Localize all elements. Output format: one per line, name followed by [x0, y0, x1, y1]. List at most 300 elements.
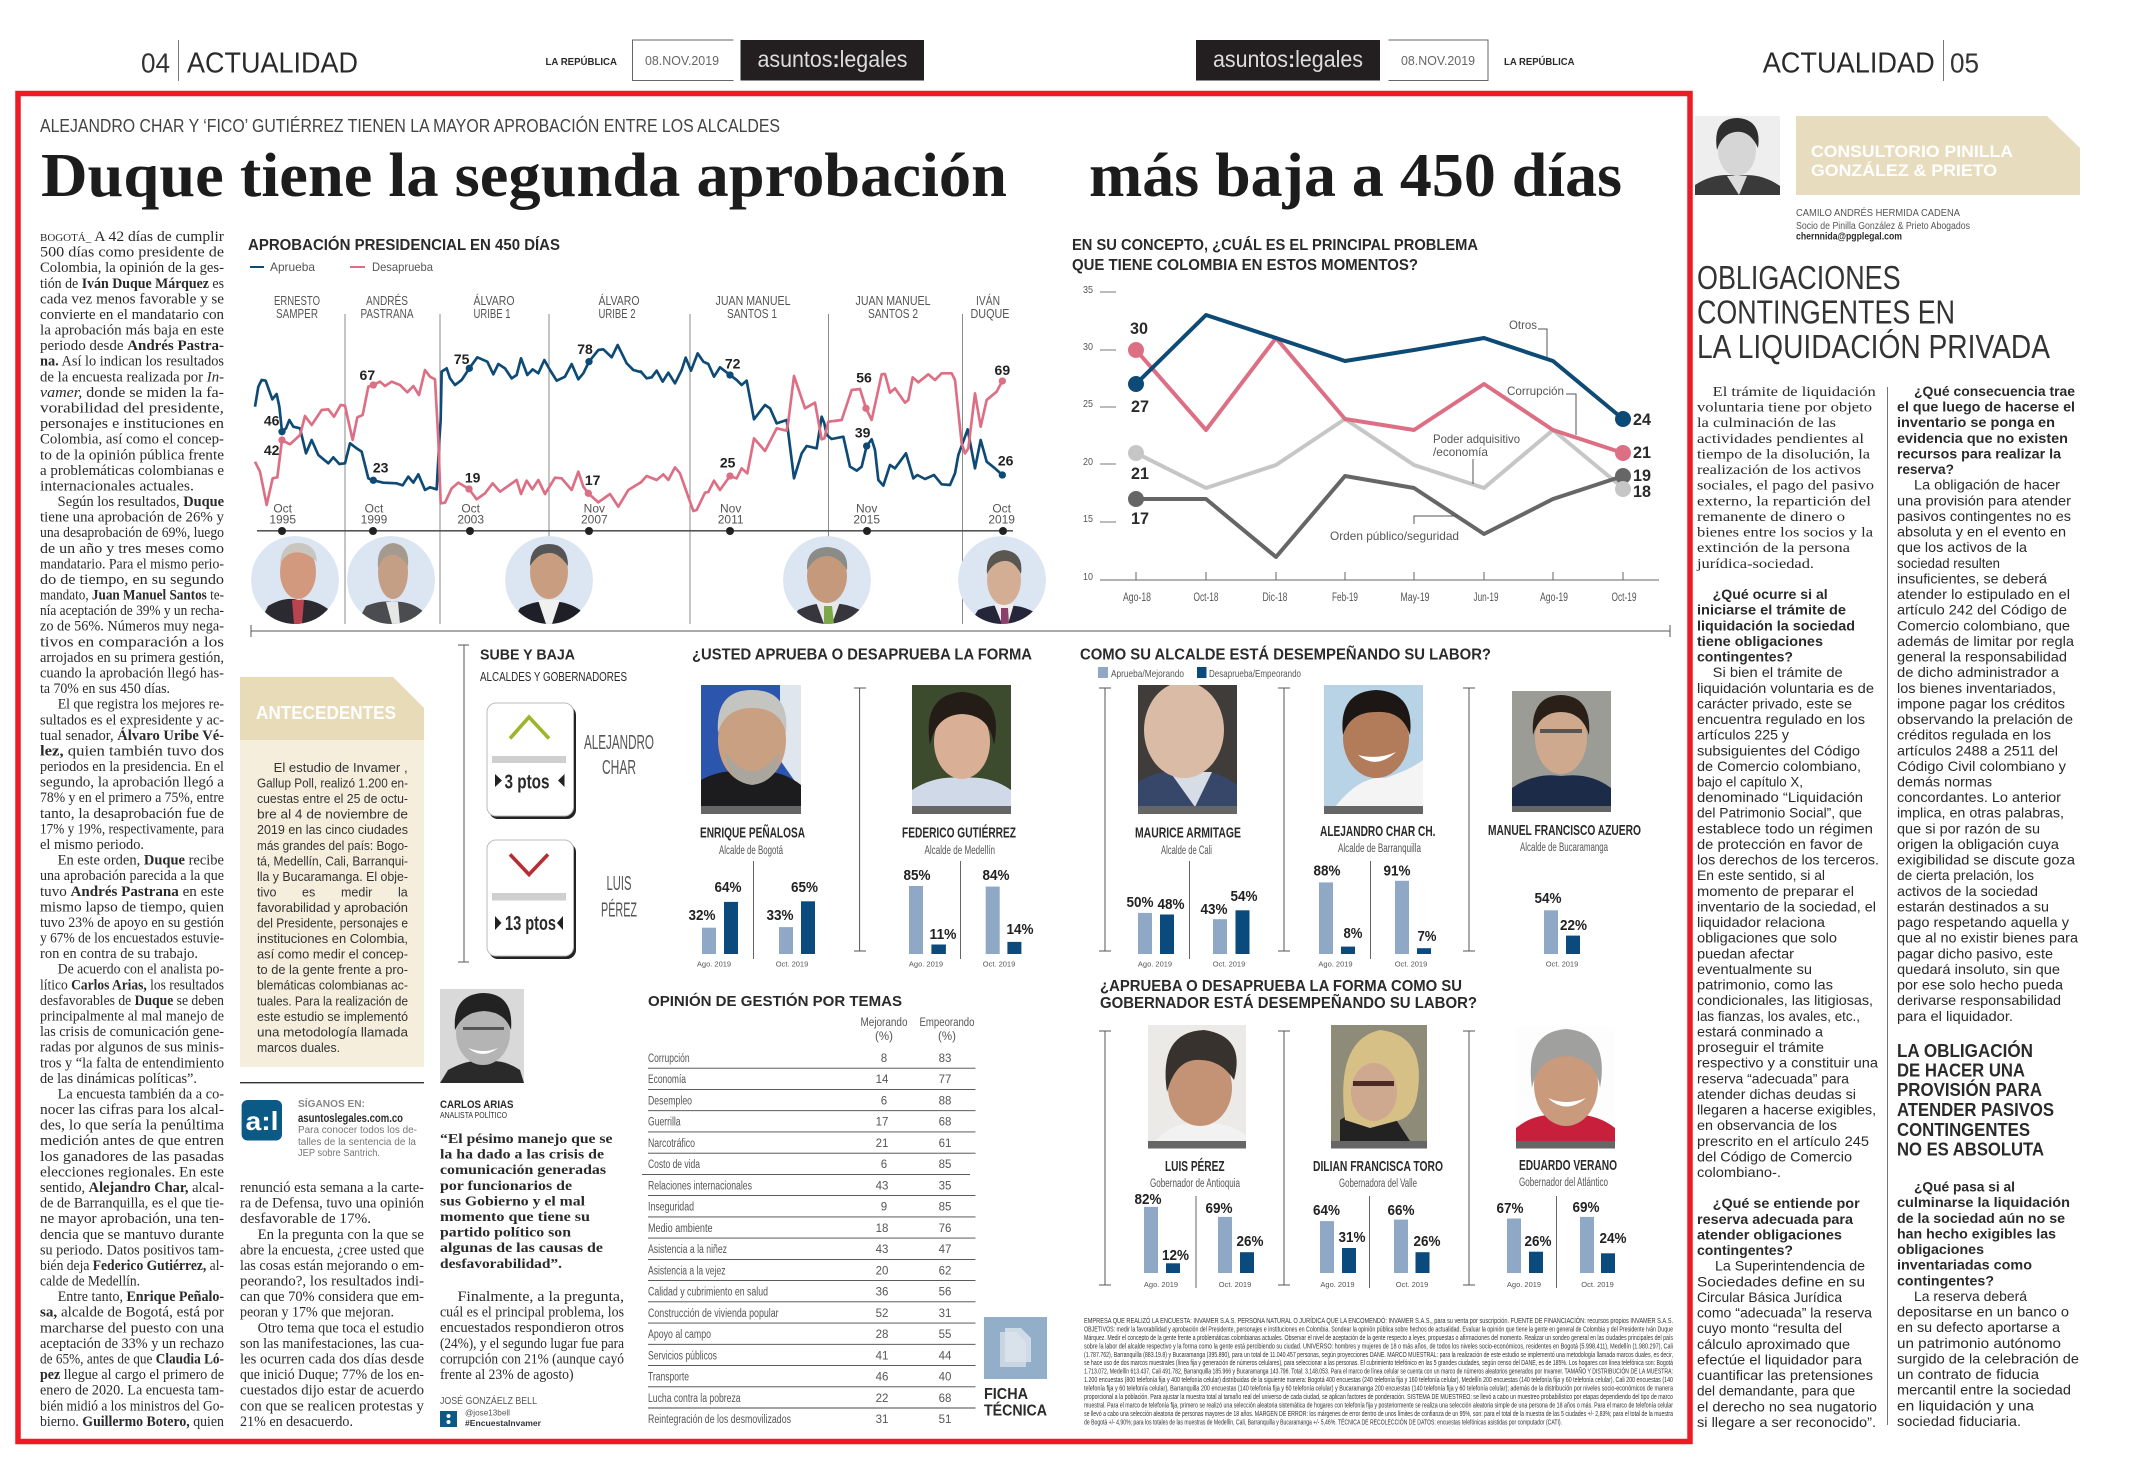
- value labels: 39: [855, 425, 871, 441]
- article text column 2: En la pregunta con la que se: [258, 1227, 424, 1243]
- article text column 2: desfavorable de 17%.: [240, 1211, 371, 1227]
- topic labels: Inseguridad: [648, 1202, 694, 1214]
- article text column 1: mismo lapso de tiempo, quien: [40, 899, 224, 915]
- empeorando values: 55: [939, 1329, 951, 1341]
- governor: Pérez: [1134, 1025, 1264, 1289]
- legal column 2 lower: surgido de la celebración de: [1897, 1351, 2079, 1366]
- governor: Toro: [1313, 1025, 1443, 1289]
- timeline axis with dots: [257, 527, 1013, 535]
- bars: 82%: [1134, 1191, 1162, 1208]
- article text column 1: y 67% de los encuestados estuvie-: [40, 931, 224, 947]
- presidential approval chart: [248, 235, 1046, 626]
- article text column 1: bién deja Federico Gutiérrez, al-: [40, 1258, 225, 1274]
- article text column 1: tros y “la falta de entendimiento: [40, 1055, 224, 1071]
- follow us text: SÍGANOS EN:: [298, 1097, 365, 1110]
- asuntos legales logo: [740, 40, 924, 80]
- empeorando values: 47: [939, 1244, 951, 1256]
- article text column 1: internacionales actuales.: [40, 478, 194, 494]
- president names: [274, 293, 1010, 321]
- legal column 1: sociales, el pago del pasivo: [1697, 478, 1874, 493]
- value labels: 18: [1633, 482, 1651, 501]
- column headers: (%): [875, 1031, 893, 1043]
- legal column 1: subsiguientes del Código: [1697, 743, 1860, 758]
- value labels: 25: [720, 455, 736, 471]
- survey technical note: telefonía fija y 60 telefonía celular), Barranquilla 200 encuestas (140 telefonía fija y 60 telefonía celular) y Bucaramanga 200 encuestas (140 telefonía fija y 60 telefonía celular); además de la distribución por niveles socio-económicos de manera: [1084, 1386, 1673, 1393]
- bars: 24%: [1600, 1230, 1626, 1247]
- topic labels: [648, 1053, 791, 1426]
- president names: ÁLVARO: [598, 293, 640, 308]
- mejorando values: 28: [876, 1329, 888, 1341]
- author byline: JOSÉ GONZÁELZ BELL: [440, 1394, 537, 1407]
- legal column 2 upper: el que luego de hacerse el: [1897, 400, 2075, 415]
- article text column 1: de de Barranquilla, es el que tie-: [40, 1196, 224, 1212]
- legal column 2 upper: inventario se ponga en: [1897, 415, 2055, 430]
- legal column 2 upper: implica, en otras palabras,: [1897, 806, 2064, 821]
- legal column 2 upper: absoluta y en el evento en: [1897, 525, 2066, 540]
- antecedentes text: cuestas entre el 25 de octu-: [257, 792, 408, 806]
- y axis: 15: [1083, 513, 1093, 525]
- legal column 1: Sociedades define en su: [1697, 1274, 1865, 1289]
- legal column 1: efectúe el liquidador para: [1697, 1352, 1862, 1367]
- column headline: OBLIGACIONES: [1697, 259, 1901, 296]
- topic labels: Asistencia a la vejez: [648, 1265, 726, 1277]
- names: CHAR: [602, 757, 636, 779]
- article text column 1: 78% y en el primero a 75%, entre: [40, 790, 224, 806]
- topic labels: Costo de vida: [648, 1159, 700, 1171]
- name: [1488, 822, 1641, 854]
- legal column 2 upper: demás normas: [1897, 774, 1992, 789]
- legal column 1: respectivo y a constituir una: [1697, 1056, 1878, 1071]
- bars: 32%: [688, 907, 716, 924]
- article text column 1: marcharse del puesto con una: [40, 1320, 225, 1336]
- antecedentes text: 2019 en las cinco ciudades: [257, 823, 408, 837]
- article text column 2: 21% en desacuerdo.: [240, 1414, 353, 1430]
- legal column 2 upper: quedará insoluto, sin que: [1897, 962, 2060, 977]
- antecedentes text: favorabilidad y aprobación: [257, 901, 408, 915]
- mejorando values: 14: [876, 1074, 889, 1086]
- bars: Ago. 2019: [1318, 960, 1353, 969]
- article text column 1: sa, alcalde de Bogotá, está por: [40, 1305, 214, 1321]
- article text column 1: nía aceptación de 39% y un recha-: [40, 603, 224, 619]
- heading: COMO SU ALCALDE ESTÁ DESEMPEÑANDO SU LABOR?: [1080, 644, 1491, 664]
- date box: 08.NOV.2019: [1401, 53, 1475, 68]
- bars: 69%: [1572, 1199, 1600, 1216]
- heading: ¿APRUEBA O DESAPRUEBA LA FORMA COMO SU: [1100, 978, 1462, 995]
- bars: Oct. 2019: [1213, 960, 1245, 969]
- antecedentes text: tuales. Para la realización de: [257, 994, 408, 1008]
- column headline: CONTINGENTES EN: [1697, 294, 1955, 331]
- article text column 2: peoran y 17% que mejoran.: [240, 1305, 394, 1321]
- legal column 1: del demandante, para que: [1697, 1384, 1855, 1399]
- name: [1519, 1157, 1617, 1189]
- legal column 2 lower: un patrimonio autónomo: [1897, 1336, 2061, 1351]
- article text column 1: medición antes de que entren: [40, 1133, 224, 1149]
- survey technical note: sobre la labor del alcalde respectivo y la forma como la gente está percibiendo su ciudad. UNIVERSO: hombres y mujeres de 18 o más años, de todos los niveles socio-económicos, residentes en Bogotá (5.998.411), Medellín (1.980.297), Cali: [1084, 1343, 1673, 1350]
- president names: JUAN MANUEL: [856, 293, 930, 308]
- value labels: 17: [1131, 509, 1149, 528]
- series: corrupcion: [1136, 338, 1623, 453]
- mejorando values: 6: [881, 1096, 887, 1108]
- legal column 1: contingentes?: [1697, 650, 1793, 665]
- bars: 26%: [1524, 1233, 1552, 1250]
- value labels: 19: [1633, 466, 1651, 485]
- legal column 1: tiempo de la disolución, la: [1697, 446, 1870, 461]
- antecedentes text: instituciones en Colombia,: [257, 932, 408, 946]
- label: [984, 1386, 1047, 1420]
- empeorando values: 76: [939, 1223, 951, 1235]
- article text column 3: frente al 23% de agosto): [440, 1367, 574, 1383]
- name: [1313, 1158, 1443, 1190]
- y axis: 30: [1083, 341, 1093, 353]
- empeorando values: 85: [939, 1202, 951, 1214]
- antecedentes text: to de la gente frente a pro-: [257, 963, 408, 977]
- legal column 1: condicionales, las litigiosas,: [1697, 993, 1873, 1008]
- article text column 1: ta 70% en sus 450 días.: [40, 681, 170, 697]
- legal column 1: liquidación la sociedad: [1697, 618, 1855, 633]
- survey technical note: de Bogotá +/- 4,90%; para los totales de las muestras de Medellín, Cali, Barranquilla y Bucaramanga +/- 5,46%. TÉCNICA DE RECOLECCIÓN DE DATOS: encuestas telefónicas asistidas por computador (CATI).: [1084, 1417, 1562, 1426]
- date labels: Oct: [461, 501, 481, 515]
- portrait: Santos: [783, 536, 871, 626]
- kicker: ALEJANDRO CHAR Y ‘FICO’ GUTIÉRREZ TIENEN LA MAYOR APROBACIÓN ENTRE LOS ALCALDES: [40, 115, 780, 136]
- article text column 1: una desaprobación de 69%, luego: [40, 525, 224, 541]
- disapprove line: [640, 373, 1002, 511]
- legal column 2 lower: contingentes?: [1897, 1273, 1994, 1288]
- survey technical note: EMPRESA QUE REALIZÓ LA ENCUESTA: INVAMER S.A.S. PERSONA NATURAL O JURÍDICA QUE LA ENCOMENDÓ: INVAMER S.A.S., para su venta por suscripción. FUENTE DE FINANCIACIÓN: recursos propios INVAMER S.A.S.: [1084, 1316, 1673, 1325]
- quote: desfavorabilidad”.: [440, 1257, 562, 1272]
- name: Alcalde de Bucaramanga: [1520, 842, 1608, 854]
- article text column 2: cuestados dijo estar de acuerdo: [240, 1383, 424, 1399]
- article text column 3: cuál es el principal problema, los: [440, 1305, 624, 1321]
- legal column 2 upper: activos de la sociedad: [1897, 884, 2038, 899]
- follow us text: [298, 1097, 417, 1159]
- section rule: [251, 625, 1670, 637]
- legal column 2 upper: artículo 242 del Código de: [1897, 603, 2067, 618]
- article text column 1: radas por algunos de sus minis-: [40, 1040, 224, 1056]
- legal column 1: La Superintendencia de: [1715, 1259, 1865, 1274]
- bars: Oct. 2019: [776, 960, 808, 969]
- mejorando values: 22: [876, 1393, 888, 1405]
- column headers: Empeorando: [920, 1017, 974, 1029]
- legal column 2 lower: han hecho exigibles las: [1897, 1226, 2056, 1241]
- legal column 2 upper: para el liquidador.: [1897, 1009, 2013, 1024]
- date labels: 1999: [361, 512, 388, 526]
- article text column 2: abre la encuesta, ¿cree usted que: [240, 1242, 424, 1258]
- series labels with leaders: Corrupción: [1507, 384, 1564, 398]
- president names: SAMPER: [276, 306, 318, 321]
- legal column 1: estará conminado a: [1697, 1024, 1823, 1039]
- quote: la ha dado a las crisis de: [440, 1148, 604, 1163]
- article text column 3: Finalmente, a la pregunta,: [458, 1289, 624, 1305]
- mejorando values: 17: [876, 1117, 888, 1129]
- legal column 1: patrimonio, como las: [1697, 978, 1833, 993]
- article text column 1: tual senador, Álvaro Uribe Vé-: [40, 728, 222, 744]
- article text column 1: de la encuesta realizada por In-: [40, 369, 223, 385]
- value labels: 24: [1633, 410, 1652, 429]
- mejorando values: 21: [876, 1138, 888, 1150]
- antecedentes text: la: [398, 885, 408, 899]
- analyst name: ANALISTA POLÍTICO: [440, 1110, 507, 1120]
- president names: SANTOS 1: [727, 306, 777, 321]
- mejorando values: 9: [881, 1202, 887, 1214]
- card: down 13 points: [487, 840, 576, 959]
- topic labels: Calidad y cubrimiento en salud: [648, 1287, 768, 1299]
- value labels: [720, 355, 1014, 471]
- article text column 1: vorabilidad del presidente,: [40, 400, 224, 416]
- legal column 1: de protección en favor de: [1697, 837, 1863, 852]
- x axis: Oct-19: [1612, 592, 1636, 604]
- legend: Aprueba: [270, 260, 315, 274]
- legal column 2 upper: pagar dicho pasivo, este: [1897, 946, 2053, 961]
- mayor: Gutiérrez: [902, 685, 1034, 969]
- antecedentes text: marcos duales.: [257, 1041, 340, 1055]
- portrait: Hermida sketch: [1695, 116, 1780, 195]
- legal column 1: prescrito en el artículo 245: [1697, 1134, 1869, 1149]
- mayor: Peñalosa: [688, 685, 818, 969]
- bars: 22%: [1560, 917, 1587, 934]
- photo: Carlos Arias: [440, 989, 524, 1083]
- article text column 1: nocer las cifras para los alcal-: [40, 1102, 224, 1118]
- red article frame: [18, 94, 1690, 1442]
- legal column 1: cálculo aproximado que: [1697, 1337, 1850, 1352]
- value labels: 69: [995, 362, 1010, 378]
- topic labels: Reintegración de los desmovilizados: [648, 1414, 791, 1426]
- chart title: APROBACIÓN PRESIDENCIAL EN 450 DÍAS: [248, 235, 560, 254]
- legal column 1: inventario de la sociedad, el: [1697, 899, 1876, 914]
- article text column 1: cuando la aprobación llegó has-: [40, 666, 224, 682]
- mayor: Char: [1314, 685, 1436, 969]
- article text column 1: personajes e instituciones en: [40, 416, 224, 432]
- legal column 1: extinción de la persona: [1697, 540, 1850, 555]
- label: FICHA: [984, 1386, 1028, 1403]
- antecedentes text: es: [302, 885, 315, 899]
- mejorando values: 6: [881, 1159, 887, 1171]
- president names: ERNESTO: [274, 293, 320, 308]
- article text column 1: El que registra los mejores re-: [58, 697, 224, 713]
- legal column 2 lower: ¿Qué pasa si al: [1914, 1180, 2015, 1195]
- name: Alcalde de Medellín: [924, 845, 995, 857]
- follow us text: asuntoslegales.com.co: [298, 1113, 403, 1125]
- chart title: EN SU CONCEPTO, ¿CUÁL ES EL PRINCIPAL PROBLEMA: [1072, 235, 1478, 254]
- legal column 2 upper: Comercio colombiano, que: [1897, 618, 2070, 633]
- quote: por funcionarios de: [440, 1179, 572, 1194]
- article text column 1: des, lo que sería la penúltima: [40, 1118, 225, 1134]
- president names: IVÁN: [976, 293, 1000, 308]
- article text column 1: La encuesta también da a co-: [58, 1086, 224, 1102]
- legal column 1: eventualmente su: [1697, 962, 1812, 977]
- mayor: Azuero: [1488, 691, 1641, 969]
- bars: [1313, 1196, 1440, 1289]
- value labels: 26: [998, 453, 1014, 469]
- bars: 48%: [1158, 896, 1184, 913]
- legal column 2 lower: un contrato de fiducia: [1897, 1367, 2039, 1382]
- legal column 2 lower: depositarse en un banco o: [1897, 1305, 2069, 1320]
- president names: SANTOS 2: [868, 306, 918, 321]
- y axis: 10: [1083, 571, 1093, 583]
- topic labels: Asistencia a la niñez: [648, 1244, 727, 1256]
- value labels: 17: [585, 472, 601, 488]
- bars: Oct. 2019: [1219, 1280, 1251, 1289]
- antecedentes text: este estudio se implementó: [257, 1010, 408, 1024]
- icon: a:l logo: [242, 1100, 282, 1140]
- survey technical note: proporcional a la población. Para ajustar la muestra total al tamaño real del universo de cada ciudad, se aplican factores de ponderación. SISTEMA DE MUESTREO: se llevó a cabo un muestreo probabilístico por etapas dependiendo del tipo de marco: [1084, 1394, 1673, 1401]
- survey technical note: Márquez. Medir el concepto de la gente frente a problemáticas colombianas actuales. Observar el nivel de aceptación de la gente respecto a leyes, propuestas o afirmaciones del momento. Realizar un sondeo general en las ciudades principales del país: [1084, 1335, 1673, 1342]
- approval lines right half: [640, 353, 1015, 526]
- article text column 1: bierno. Guillermo Botero, quien: [40, 1414, 225, 1430]
- date labels: 2011: [718, 512, 744, 526]
- consultorio banner: [1796, 116, 2080, 195]
- article text column 1: enero de 2020. La encuesta tam-: [40, 1383, 224, 1399]
- bars: 54%: [1534, 890, 1562, 907]
- antecedentes box: [240, 677, 424, 1067]
- president names: ÁLVARO: [474, 293, 514, 308]
- problem line chart: [1072, 235, 1659, 604]
- legend: Desaprueba: [372, 260, 433, 274]
- topic labels: Relaciones internacionales: [648, 1180, 752, 1192]
- article text column 1: do de tiempo, en su segundo: [40, 572, 224, 588]
- bars: 64%: [714, 879, 742, 896]
- article text column 2: las cosas están mejorando o em-: [240, 1258, 424, 1274]
- consultorio banner: CONSULTORIO PINILLA: [1811, 142, 2013, 161]
- topic labels: Apoyo al campo: [648, 1329, 711, 1341]
- mejorando values: 41: [876, 1350, 888, 1362]
- bars: Oct. 2019: [983, 960, 1015, 969]
- mejorando values: 43: [876, 1244, 888, 1256]
- page number 05: 05: [1950, 48, 1979, 79]
- governor: Verano: [1496, 1027, 1626, 1289]
- bars: 50%: [1126, 894, 1154, 911]
- legal column 1: jurídica-sociedad.: [1696, 556, 1814, 571]
- legal column 1: momento de preparar el: [1697, 884, 1854, 899]
- heading: [1100, 978, 1477, 1012]
- names: LUIS: [606, 873, 632, 895]
- name: MAURICE ARMITAGE: [1135, 825, 1241, 842]
- topic labels: Guerrilla: [648, 1117, 681, 1129]
- bars: Oct. 2019: [1546, 960, 1578, 969]
- president names: URIBE 2: [598, 306, 636, 321]
- legal column 2 lower: en su defecto aportarse a: [1897, 1320, 2060, 1335]
- bars: [1134, 1191, 1264, 1289]
- legal column 2 upper: general la responsabilidad: [1897, 650, 2067, 665]
- article text column 1: arrojados en su primera gestión,: [40, 650, 224, 666]
- article text column 1: tivos en comparación a los: [40, 634, 225, 650]
- column headline: [1697, 259, 2050, 365]
- publication name: LA REPÚBLICA: [1504, 55, 1574, 68]
- article text column 1: De acuerdo con el analista po-: [58, 962, 224, 978]
- approval lines left half: [255, 341, 642, 526]
- quote: “El pésimo manejo que se: [440, 1132, 612, 1147]
- legal column 2 lower: culminarse la liquidación: [1897, 1195, 2070, 1210]
- pull quote: [1897, 1040, 2054, 1160]
- series: otros: [1136, 315, 1623, 419]
- author credit: CAMILO ANDRÉS HERMIDA CADENA: [1796, 206, 1960, 219]
- legal column 2 upper: exigibilidad se discute goza: [1897, 853, 2075, 868]
- quote: comunicación generadas: [440, 1163, 607, 1178]
- label: TÉCNICA: [984, 1403, 1047, 1420]
- bars: 91%: [1384, 862, 1410, 880]
- legal column 1: atender dichas deudas si: [1697, 1087, 1856, 1102]
- empeorando values: 68: [939, 1393, 951, 1405]
- legal column 1: cuyo monto “resulta del: [1697, 1321, 1842, 1336]
- legal column 1: remanente de dinero o: [1697, 509, 1845, 524]
- name: Gobernador de Antioquia: [1150, 1178, 1240, 1190]
- x axis: Feb-19: [1332, 592, 1358, 604]
- article text column 1: tuvo Andrés Pastrana en este: [40, 884, 221, 900]
- empeorando values: 62: [939, 1265, 951, 1277]
- legal column 1: del Código de Comercio: [1697, 1149, 1852, 1164]
- legal column 1: encuentra regulado en los: [1697, 712, 1865, 727]
- analyst block: [440, 989, 616, 1272]
- names: [584, 732, 654, 922]
- x axis: May-19: [1400, 592, 1430, 604]
- value labels: 67: [360, 367, 375, 383]
- name: MANUEL FRANCISCO AZUERO: [1488, 822, 1641, 839]
- mejorando values: 20: [876, 1265, 888, 1277]
- article text column 1: convierte en el mandatario con: [40, 307, 224, 323]
- date labels: Nov: [856, 501, 877, 515]
- value labels: 27: [1131, 397, 1149, 416]
- pull quote: NO ES ABSOLUTA: [1897, 1140, 2044, 1160]
- markers: [1128, 342, 1631, 507]
- asuntos legales logo: asuntos:legales: [1213, 46, 1363, 72]
- article text column 1: 500 días como presidente de: [40, 245, 224, 261]
- bars: Ago. 2019: [1320, 1280, 1355, 1289]
- consultorio banner: GONZÁLEZ & PRIETO: [1811, 161, 1997, 180]
- article text column 1: segundo, la aprobación llegó a: [40, 775, 225, 791]
- value labels: 78: [577, 341, 593, 357]
- x axis: Ago-19: [1540, 592, 1568, 604]
- article text column 1: de 65%, antes de que Claudia Ló-: [40, 1351, 229, 1367]
- value labels: [1130, 319, 1652, 528]
- follow us text: talles de la sentencia de la: [298, 1137, 416, 1148]
- article text column 1: tiene una aprobación de 26% y: [40, 510, 225, 526]
- value labels: [264, 341, 601, 488]
- legal column 1: carácter privado, este se: [1697, 696, 1852, 711]
- legal column 2 lower: de la sociedad aún no se: [1897, 1211, 2065, 1226]
- legal column 1: las fianzas, los avales, etc.,: [1697, 1009, 1860, 1024]
- bars: 31%: [1338, 1229, 1366, 1246]
- legal column 1: si llegare a ser reconocido”.: [1697, 1415, 1876, 1430]
- legend: Desaprueba/Empeorando: [1209, 668, 1301, 680]
- article text column 1: na. Así lo indican los resultados: [40, 354, 222, 370]
- date labels: Oct: [273, 501, 293, 515]
- legal column 2 upper: Código Civil colombiano y: [1897, 759, 2066, 774]
- name: EDUARDO VERANO: [1519, 1157, 1617, 1174]
- date labels: 2019: [988, 512, 1015, 526]
- pull quote: ATENDER PASIVOS: [1897, 1100, 2054, 1120]
- date box: [632, 40, 734, 80]
- legal column 2 upper: atender lo estipulado en el: [1897, 587, 2070, 602]
- portrait: Uribe: [505, 536, 593, 626]
- topic labels: Economía: [648, 1074, 686, 1086]
- article text column 1: Entre tanto, Enrique Peñalo-: [58, 1289, 225, 1305]
- panel: governors approval: [1099, 978, 1626, 1289]
- bars: [1496, 1196, 1626, 1289]
- legal column 2 upper: ¿Qué consecuencia trae: [1914, 384, 2075, 399]
- mejorando values: 36: [876, 1287, 888, 1299]
- name: ENRIQUE PEÑALOSA: [700, 824, 805, 842]
- legal column 1: Si bien el trámite de: [1713, 665, 1843, 680]
- series labels with leaders: Otros: [1509, 318, 1537, 332]
- disapprove line: [255, 370, 642, 507]
- bars: Ago. 2019: [909, 960, 943, 969]
- legal column 1: El trámite de liquidación: [1713, 384, 1876, 399]
- legal column 2 upper: de dicho administrador a: [1897, 665, 2059, 680]
- column headers: (%): [938, 1031, 956, 1043]
- heading: GOBERNADOR ESTÁ DESEMPEÑANDO SU LABOR?: [1100, 992, 1477, 1012]
- heading: ¿USTED APRUEBA O DESAPRUEBA LA FORMA: [692, 646, 1032, 664]
- bars: [904, 861, 1034, 969]
- empeorando values: 88: [939, 1096, 951, 1108]
